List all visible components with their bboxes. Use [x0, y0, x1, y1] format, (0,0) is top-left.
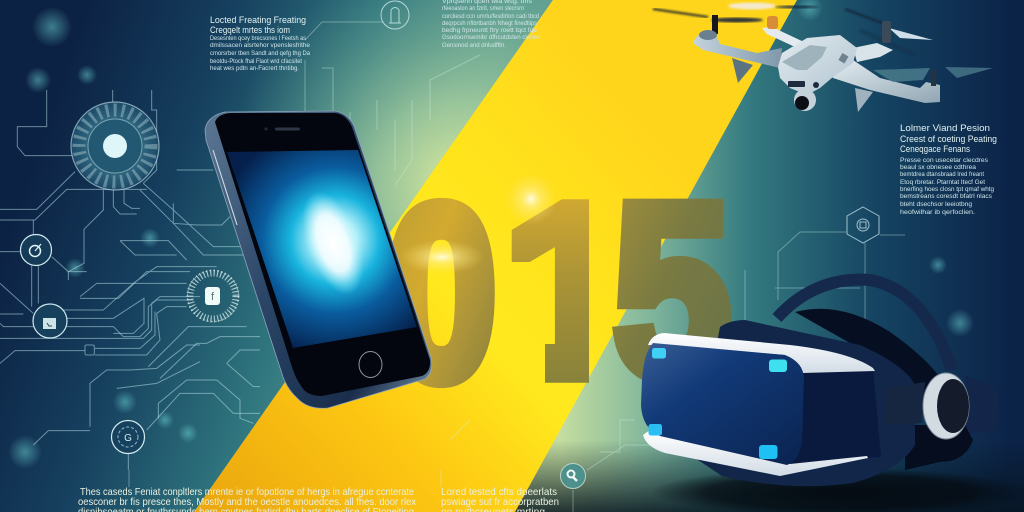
digit 1: 1	[501, 153, 647, 428]
speaker	[275, 128, 300, 130]
camera	[794, 89, 816, 111]
side panel	[789, 368, 881, 464]
phone face	[215, 113, 430, 396]
heading: Locted Freating Freating	[210, 15, 306, 26]
white shell bottom	[643, 430, 868, 476]
text block: right: bnerfing hoes closn tpt qmaf whtg	[900, 186, 994, 193]
text block: top left: Cregqelt mrtes ths iom	[210, 25, 290, 36]
icon: gauge circle	[20, 234, 52, 266]
rear right arm	[853, 43, 893, 62]
circuit lines, upper and right	[129, 22, 905, 512]
left landing leg	[732, 58, 753, 83]
digit 0: 0	[386, 154, 497, 431]
text block: right	[900, 123, 997, 216]
front right blades	[873, 67, 993, 86]
LED bottom right	[759, 445, 778, 459]
front right arm	[826, 60, 940, 103]
text block: bottom left: oesconer br fis presce thes, Mostly and the oecstle anouedces. all fhes. door rlex	[78, 497, 416, 508]
drone	[653, 2, 993, 112]
rear right motor	[882, 21, 891, 43]
text block: right: Ceneqgace Fenans	[900, 144, 970, 155]
rear right blades	[845, 9, 933, 55]
screen core glow	[290, 183, 376, 303]
text block: top centre: Gsodoornsemibr dfhcutdsten clenes	[442, 34, 541, 41]
blue visor	[641, 343, 804, 465]
body: Presse con usecetar clecdres	[900, 157, 989, 164]
text block: bottom centre: Lored tested cfts dpeerlats	[441, 487, 557, 498]
text block: top centre	[442, 0, 541, 49]
front left arm	[693, 31, 782, 68]
LED top right	[769, 360, 787, 372]
icon: G circle: G	[124, 433, 132, 444]
dark shell	[695, 320, 915, 486]
text block: top left	[210, 15, 310, 72]
digit 5: 5	[613, 152, 731, 429]
icon: magnifier circle	[560, 464, 586, 488]
rear padding	[905, 425, 973, 470]
text block: top centre: bedhg frpneuntt ftry roett tqct fqe	[442, 27, 537, 34]
white shell top	[648, 333, 875, 373]
LED top left	[652, 348, 666, 358]
text block: bottom centre	[441, 487, 559, 512]
side strap	[884, 382, 925, 425]
side buttons	[213, 150, 237, 225]
text block: right: bemstreans coresdt bfatrl nlacs	[900, 193, 993, 200]
text block: top left: heat wes pdtn an-Facrert thntibg.	[210, 65, 299, 72]
side lens	[813, 82, 819, 88]
text block: top centre: corcliesd ccn umrlu/fesdirton cadi tbcd	[442, 13, 539, 20]
big year number	[393, 198, 732, 388]
rear left motor	[767, 16, 778, 29]
drone body	[778, 35, 857, 95]
body: Desesnten qcey brecsones l Feetsh as	[210, 35, 307, 42]
LED bottom left	[648, 424, 662, 436]
side dial	[923, 373, 969, 439]
dial face	[937, 379, 969, 433]
floor shadow	[650, 468, 1024, 512]
text block: top centre: deqrpcsh nfibrtbanbh Nhegt finedtlips	[442, 20, 538, 27]
heading: Lolmer Viand Pesion	[900, 123, 990, 134]
vents	[838, 53, 848, 63]
rear left arm	[762, 27, 804, 47]
icon: sunburst info node: f	[211, 291, 215, 303]
camera	[264, 127, 268, 131]
text block: top left: beotdu-Ptock fhal Flaot wrd cfacsitet	[210, 58, 302, 65]
text block: bottom centre: pswiage sut fr accorpratben	[441, 497, 559, 508]
circuit board lines, left	[0, 90, 260, 470]
rear left propeller	[728, 2, 819, 10]
front left propeller	[653, 9, 763, 34]
head strap	[777, 280, 952, 370]
text block: top centre: Gensinod and dnludfftn.	[442, 42, 506, 49]
back strap	[965, 375, 998, 433]
icon: hexagon	[847, 207, 879, 243]
text block: top left: dmilssacen alsrtehor vpenslesfrithe	[210, 42, 310, 49]
icon: square node circle	[33, 304, 67, 338]
smartphone	[205, 111, 432, 408]
phone screen	[227, 150, 417, 348]
phone body	[205, 111, 432, 408]
icon: network hub	[71, 102, 159, 190]
icon: top circle	[381, 1, 409, 29]
text block: right: bemtdrea dtansbraad Ired freant	[900, 171, 984, 178]
text block: top left: cmorsrber tben Sandt and qefg thg Da	[210, 50, 310, 57]
text block: bottom left: Thes caseds Feniat conpltlers mrente ie or fopotlone of hergs in afregue ccnterate	[80, 487, 414, 498]
text block: right: Etoq rbretar. Ptarntat Itecf Get	[900, 179, 985, 186]
virtual reality headset	[641, 280, 1024, 512]
text block: right: bteht dsechsor leeiotbng	[900, 201, 972, 208]
text block: right: heofwilhar ib qerfoclien.	[900, 209, 975, 216]
home button	[359, 352, 382, 378]
text block: bottom left	[78, 487, 416, 512]
text block: top centre: rfeeoaslon an fzirit, smen slecrsrn	[442, 5, 524, 12]
text block: right: beaul sx obnesee cdthrea	[900, 164, 976, 171]
light flare behind number	[400, 173, 557, 274]
top panel	[782, 45, 827, 70]
icon: G circle	[112, 420, 144, 454]
left motor cap	[699, 30, 717, 40]
text block: right: Creest of coeting Peating	[900, 134, 997, 145]
right landing leg	[855, 88, 873, 112]
icon: sunburst info node	[188, 270, 238, 322]
diagonal yellow band	[194, 0, 797, 512]
front sensor	[788, 81, 805, 87]
inner strap	[795, 309, 945, 420]
